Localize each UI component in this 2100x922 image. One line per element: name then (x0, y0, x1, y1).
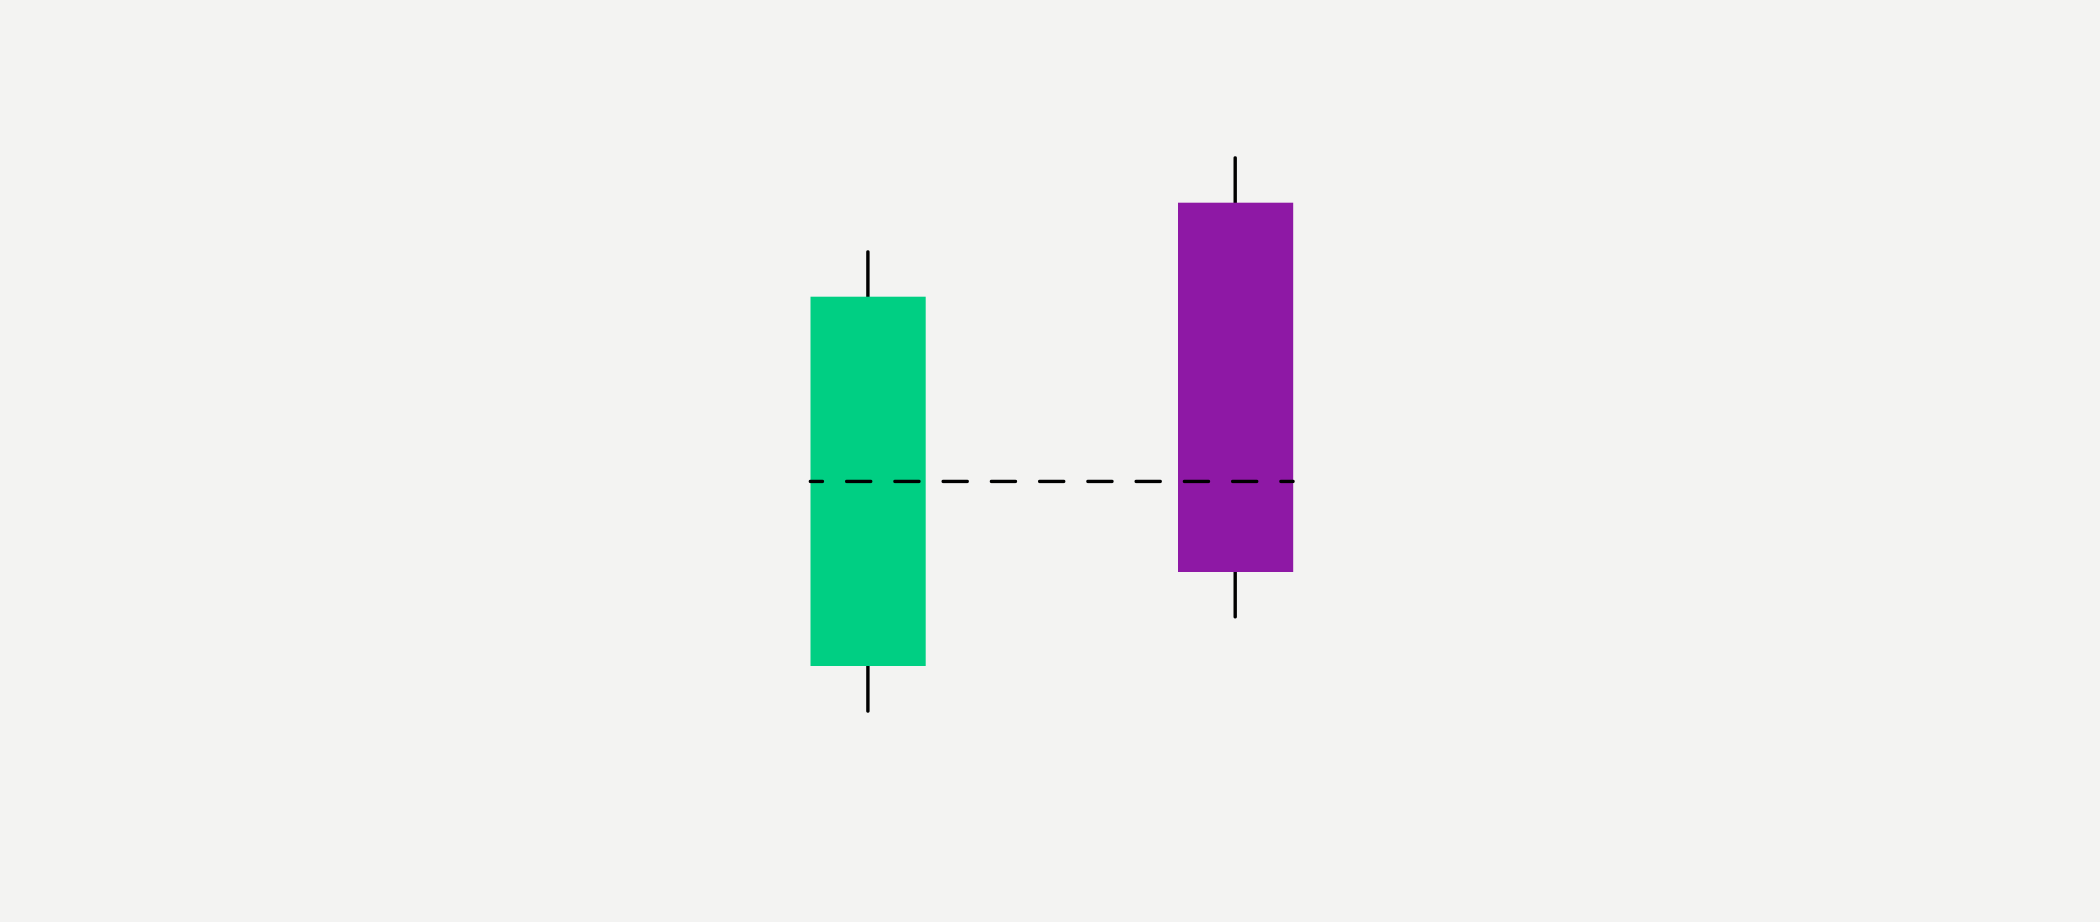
purple candlestick (1178, 158, 1293, 617)
green candlestick (810, 252, 926, 711)
dashed horizontal level line (810, 480, 1293, 483)
